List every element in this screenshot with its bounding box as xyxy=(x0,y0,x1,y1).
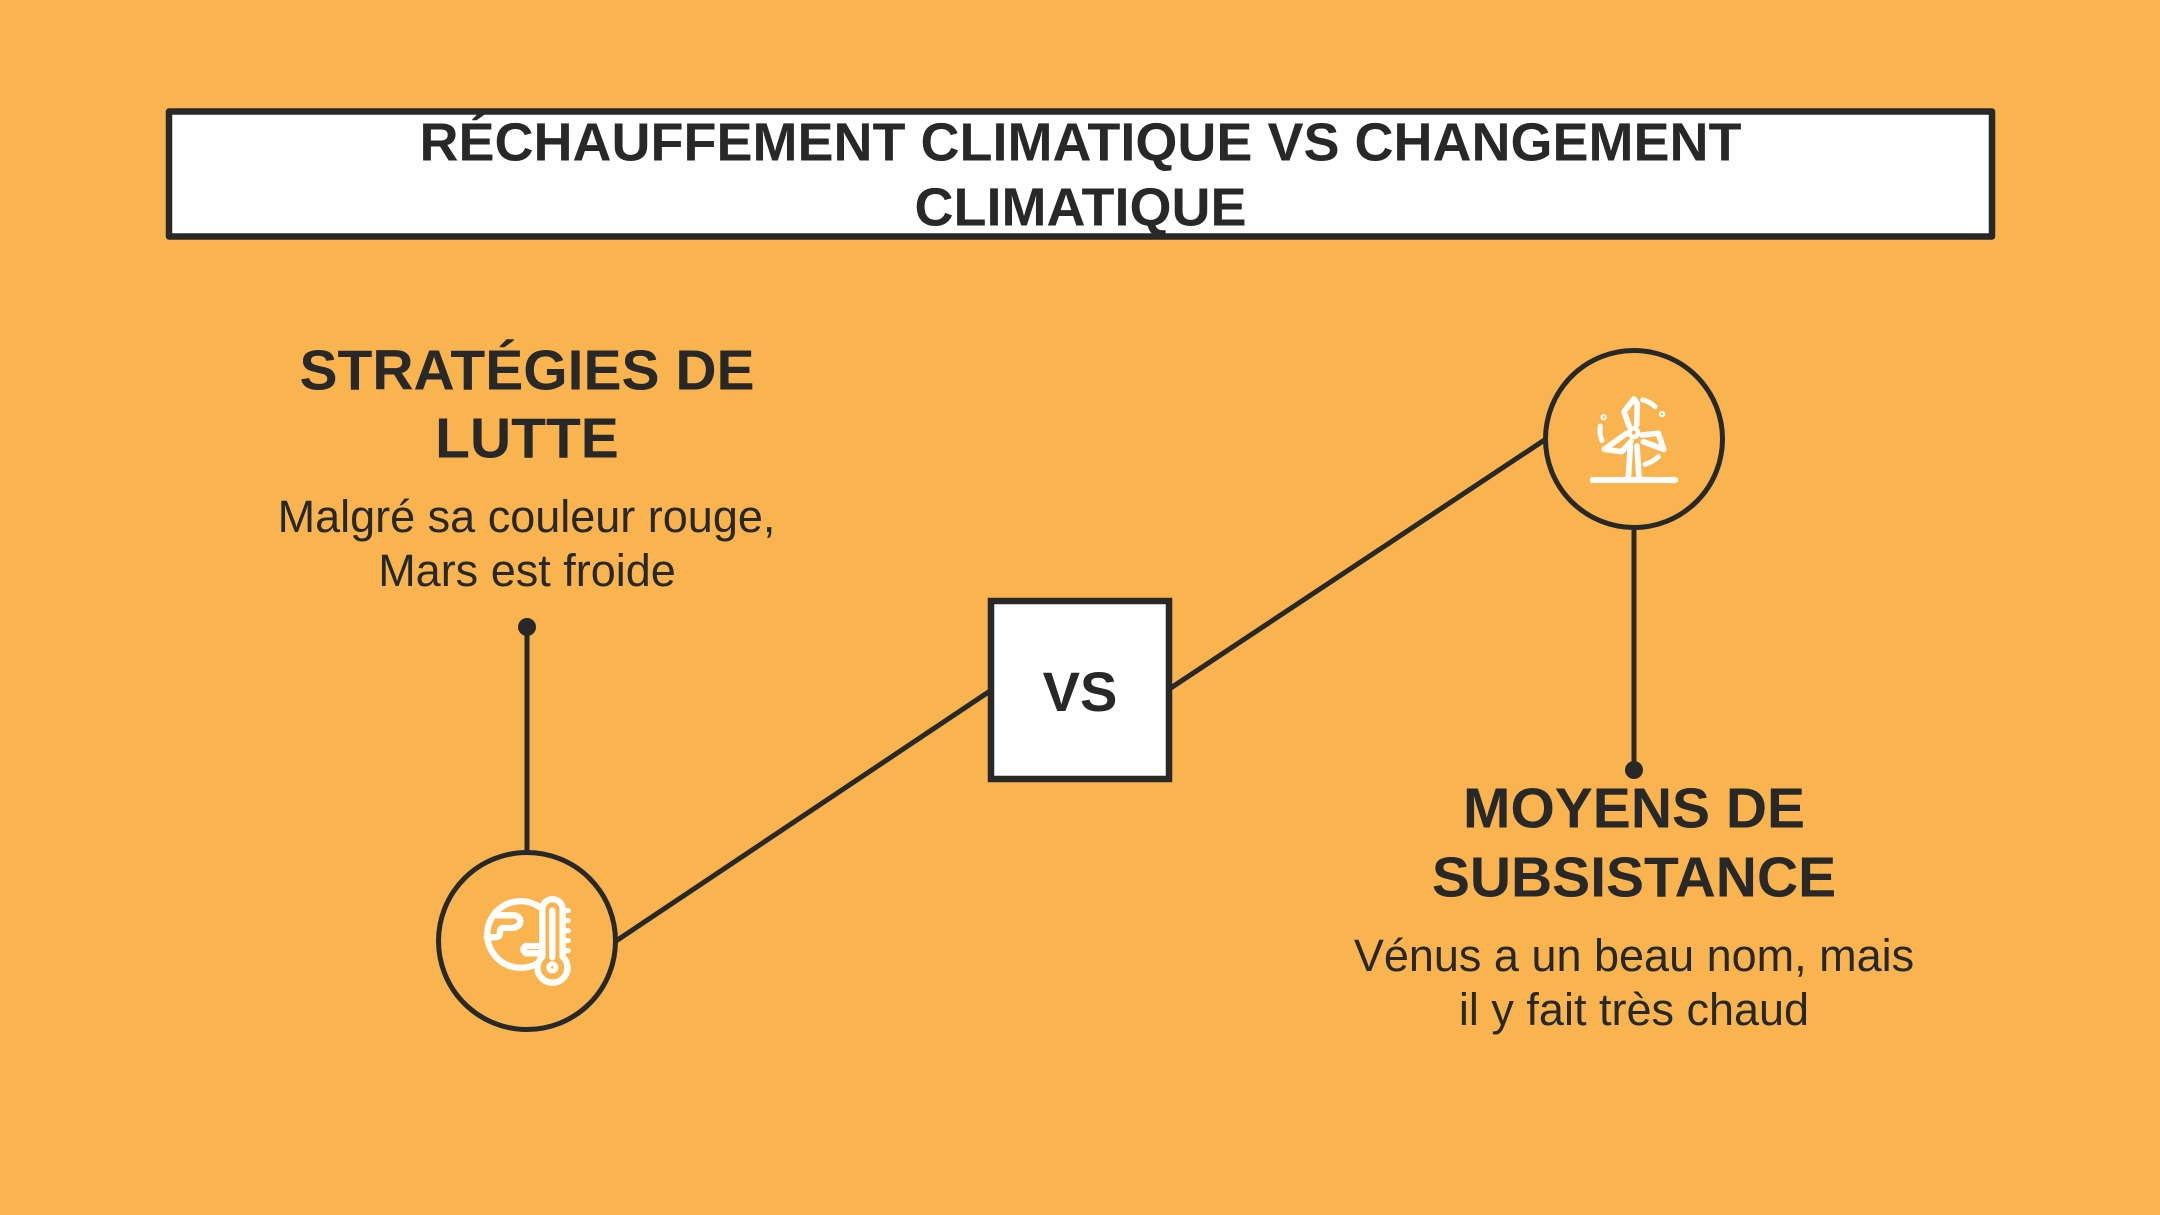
VS box: VS xyxy=(1043,660,1117,723)
right description: Vénus a un beau nom, mais xyxy=(1354,930,1914,981)
title banner: CLIMATIQUE xyxy=(915,178,1246,238)
connector line: left circle to VS box xyxy=(616,691,990,941)
connector line: VS box to right circle xyxy=(1170,439,1546,688)
title banner: RÉCHAUFFEMENT CLIMATIQUE VS CHANGEMENT xyxy=(420,112,1741,172)
right description xyxy=(1354,930,1914,1035)
right heading: MOYENS DE xyxy=(1463,776,1805,840)
icon: globe thermometer xyxy=(487,899,568,983)
right circle xyxy=(1546,350,1722,528)
left circle xyxy=(438,852,616,1030)
right heading: SUBSISTANCE xyxy=(1432,846,1836,910)
right description: il y fait très chaud xyxy=(1459,984,1809,1035)
left pin connector xyxy=(518,618,536,855)
left description xyxy=(278,491,775,596)
title banner xyxy=(169,112,1992,238)
right pin connector xyxy=(1625,527,1643,779)
left heading: LUTTE xyxy=(435,406,619,470)
left description: Malgré sa couleur rouge, xyxy=(278,491,775,542)
icon: wind turbine xyxy=(1593,399,1675,480)
left heading xyxy=(300,338,754,470)
left description: Mars est froide xyxy=(378,545,676,596)
left heading: STRATÉGIES DE xyxy=(300,338,754,402)
VS box xyxy=(991,601,1169,779)
right heading xyxy=(1432,776,1836,910)
